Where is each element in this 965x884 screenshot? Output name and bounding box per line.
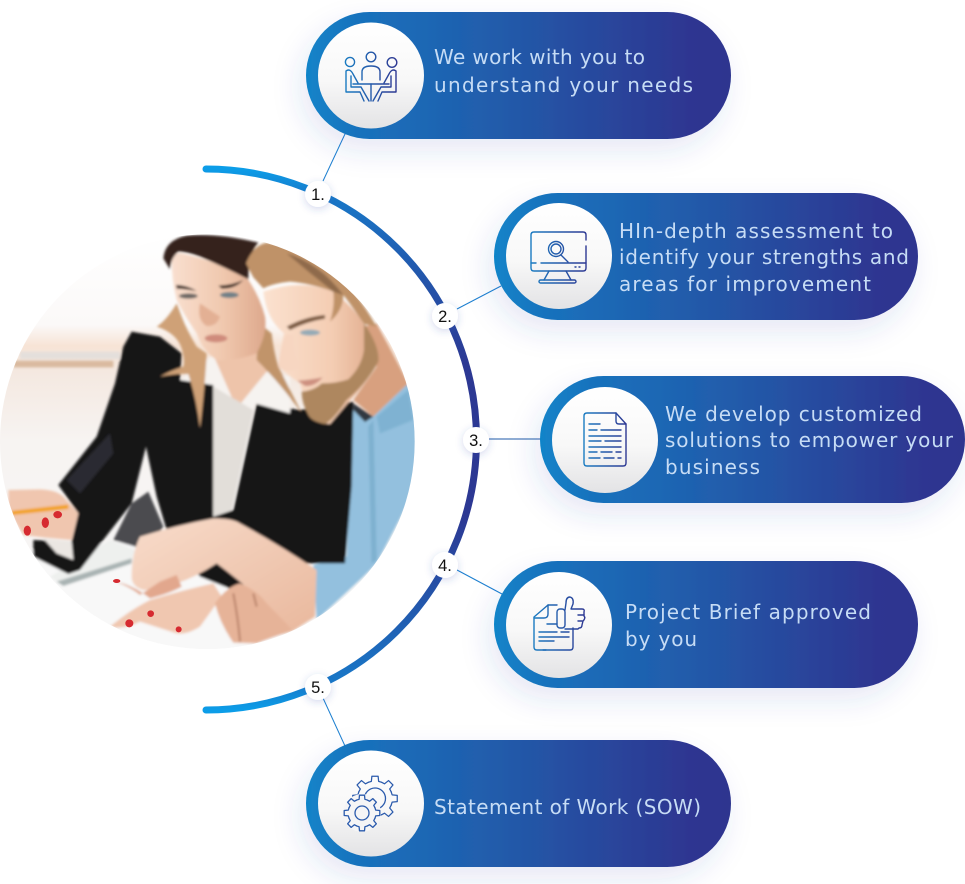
woman's hand with pencil [8, 489, 78, 540]
woman's neck and blouse [215, 353, 268, 404]
step 2 text [619, 219, 909, 296]
step 3 text: business [665, 455, 760, 479]
step 2 text: HIn-depth assessment to [619, 219, 893, 243]
number badge 1: 1. [311, 186, 325, 204]
step 1 pill [306, 12, 731, 139]
step 3 text [665, 402, 954, 479]
number badge 5: 5. [311, 679, 325, 697]
number badge 5 [305, 674, 331, 700]
number badge 3: 3. [469, 432, 483, 450]
number badge 1 [305, 181, 331, 207]
man's nose shade [280, 362, 281, 363]
woman's blond hair [157, 303, 207, 428]
step 4 pill [494, 561, 918, 688]
step 1 text [434, 45, 693, 97]
step 3 icon: document [552, 387, 658, 493]
number badge 3 [463, 427, 489, 453]
hands on desk [110, 583, 222, 634]
step 3 text: We develop customized [665, 402, 922, 426]
step 4 text: by you [625, 627, 697, 651]
red nails [24, 511, 182, 632]
number badge 2 [432, 303, 458, 329]
man's face [263, 285, 377, 424]
notebook [53, 538, 133, 580]
man's forearm [132, 518, 317, 631]
jacket lower fold [113, 492, 163, 550]
woman's dark hair [163, 235, 258, 279]
man's neck [353, 323, 408, 417]
woman's face [172, 253, 266, 360]
step 4 text: Project Brief approved [625, 600, 871, 624]
connector lines [323, 134, 541, 746]
step 2 text: identify your strengths and [619, 245, 909, 269]
step 2 pill [494, 193, 918, 320]
step 1 icon: meeting around table [318, 22, 424, 128]
step 2 icon: monitor with magnifier [506, 203, 612, 309]
man's hair [246, 243, 377, 327]
step 4 icon: approved document with thumbs up [506, 572, 612, 678]
step 3 pill [540, 376, 965, 503]
number badge 2: 2. [438, 308, 452, 326]
number badge 4: 4. [438, 557, 452, 575]
step 5 text: Statement of Work (SOW) [434, 795, 701, 819]
man's shirt [313, 383, 420, 620]
woman's jacket [33, 332, 353, 590]
step 5 icon: gears [318, 750, 424, 856]
step 2 text: areas for improvement [619, 272, 871, 296]
step 3 text: solutions to empower your [665, 428, 954, 452]
step 4 text [625, 600, 871, 651]
photo: two colleagues at a desk [0, 233, 420, 650]
man's beard [302, 323, 378, 424]
step 5 pill [306, 740, 731, 867]
step 1 text: We work with you to [434, 45, 645, 69]
curved timeline arc [206, 169, 477, 710]
number badge 4 [432, 552, 458, 578]
step 1 text: understand your needs [434, 73, 693, 97]
